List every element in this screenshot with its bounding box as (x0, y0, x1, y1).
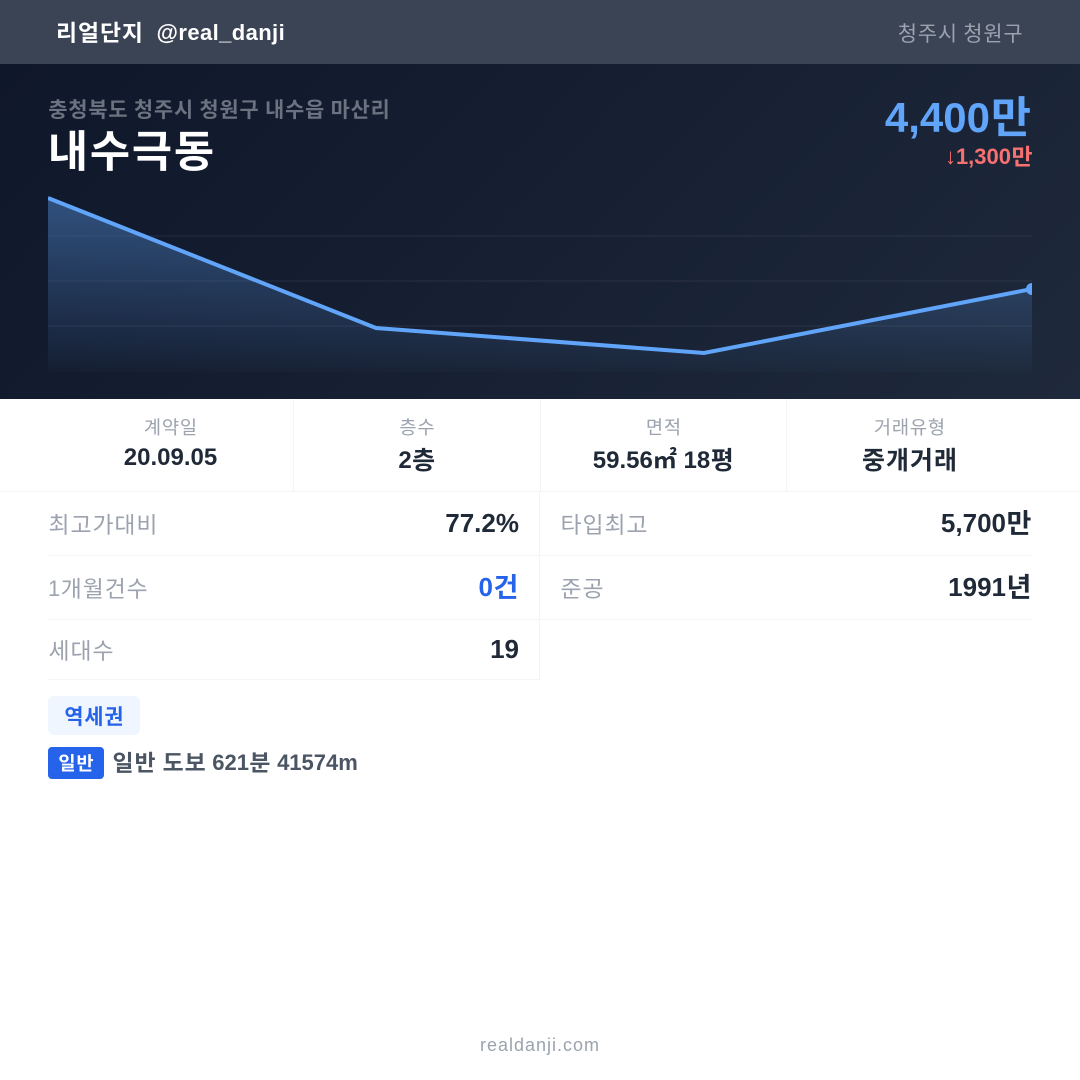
area line chart (48, 196, 1032, 362)
header bar (0, 0, 1080, 64)
summary stats row (0, 399, 1080, 492)
stat: contract date: 20.09.05 (124, 444, 217, 471)
address: 충청북도 청주시 청원구 내수읍 마산리 (48, 99, 391, 122)
row: households: 19 (490, 634, 519, 664)
station area tag (48, 696, 140, 735)
stat: deal type: 중개거래 (862, 447, 958, 475)
badge: 일반 (58, 753, 94, 774)
row: households: 세대수 (48, 638, 114, 664)
complex name: 내수극동 (48, 128, 216, 177)
row: monthly deals (48, 572, 520, 603)
row: type high: 5,700만 (941, 508, 1033, 539)
stat: deal type: 거래유형 (874, 417, 946, 438)
stat: contract date (124, 417, 217, 471)
row: built year: 준공 (560, 576, 604, 602)
stat: deal type (862, 417, 958, 475)
stat: contract date: 계약일 (144, 417, 198, 438)
stat: area (593, 417, 735, 475)
price: 4,400만 (885, 94, 1033, 143)
price change: ↓1,300만 (945, 144, 1033, 170)
region label: 청주시 청원구 (898, 23, 1023, 46)
row: built year: 1991년 (948, 572, 1033, 603)
stat: floor (398, 417, 436, 475)
row: ratio to peak: 최고가대비 (48, 512, 158, 538)
stat: floor: 2층 (398, 447, 436, 475)
badge (48, 747, 104, 779)
row: built year (560, 572, 1033, 603)
row: ratio to peak: 77.2% (445, 508, 519, 538)
station area tag: 역세권 (64, 706, 124, 729)
row: type high: 타입최고 (560, 512, 648, 538)
brand name and handle: 리얼단지 @real_danji (56, 20, 285, 46)
stat: area: 59.56㎡ 18평 (593, 447, 735, 475)
stat: area: 면적 (646, 417, 682, 438)
details table (48, 492, 1033, 680)
row: ratio to peak (48, 508, 519, 538)
row: monthly deals: 1개월건수 (48, 576, 149, 602)
stat: floor: 층수 (399, 417, 435, 438)
footer site name: realdanji.com (480, 1035, 600, 1055)
hero panel (0, 64, 1080, 399)
row: type high (560, 508, 1033, 539)
row: households (48, 634, 519, 664)
row: monthly deals: 0건 (479, 572, 520, 603)
walking distance: 일반 도보 621분 41574m (112, 750, 358, 776)
transit info (48, 747, 358, 779)
